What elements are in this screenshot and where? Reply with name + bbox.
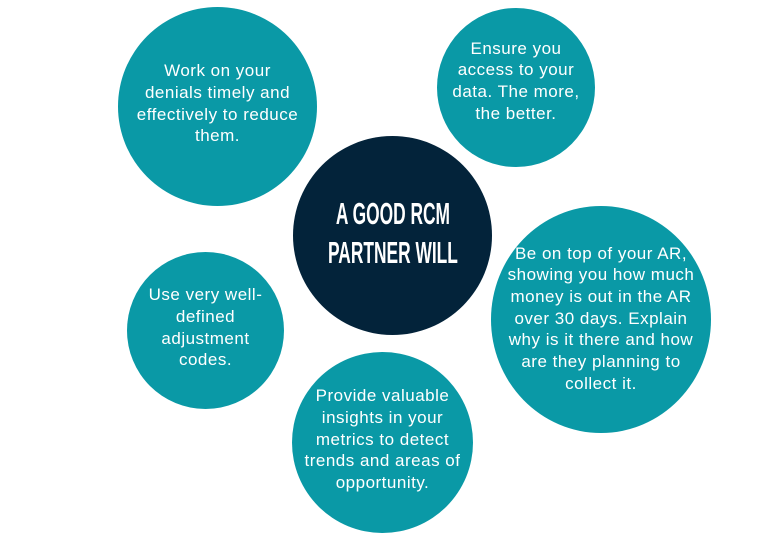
circle: denials: denials timely and — [145, 83, 290, 102]
circle: insights: Provide valuable — [316, 386, 449, 405]
circle: insights: trends and areas of — [304, 451, 460, 470]
circle: denials — [118, 7, 317, 206]
circle: AR: showing you how much — [508, 265, 694, 284]
circle: adjustment codes: Use very well- — [149, 285, 262, 304]
circle: denials: them. — [195, 126, 240, 145]
circle: center title — [293, 136, 492, 335]
circle: data access: Ensure you — [470, 39, 561, 58]
circle: adjustment codes: adjustment — [161, 328, 250, 348]
circle: denials: effectively to reduce — [137, 104, 298, 124]
circle: data access: access to your — [458, 60, 574, 79]
circle: data access: the better. — [475, 104, 557, 123]
circle: denials: Work on your — [164, 61, 271, 80]
circle: AR: over 30 days. Explain — [514, 309, 688, 328]
circle: center title: A GOOD RCM — [335, 196, 450, 230]
circle: adjustment codes: defined — [176, 307, 235, 326]
circle: data access — [437, 8, 595, 167]
circle: AR — [491, 206, 711, 433]
circle: adjustment codes: codes. — [179, 350, 232, 369]
circle: insights: insights in your — [322, 408, 443, 427]
circle: center title: PARTNER WILL — [328, 234, 457, 270]
circle: AR: are they planning to — [521, 352, 681, 371]
circle: insights: opportunity. — [336, 473, 429, 492]
circle: adjustment codes — [127, 252, 284, 409]
circle: insights: metrics to detect — [316, 430, 449, 449]
circle: AR: Be on top of your AR, — [515, 244, 687, 263]
circle: data access: data. The more, — [452, 82, 580, 101]
circle: insights — [292, 352, 473, 533]
circle: AR: why is it there and how — [509, 330, 693, 349]
circle: AR: collect it. — [565, 374, 637, 393]
circle: AR: money is out in the AR — [510, 287, 692, 306]
